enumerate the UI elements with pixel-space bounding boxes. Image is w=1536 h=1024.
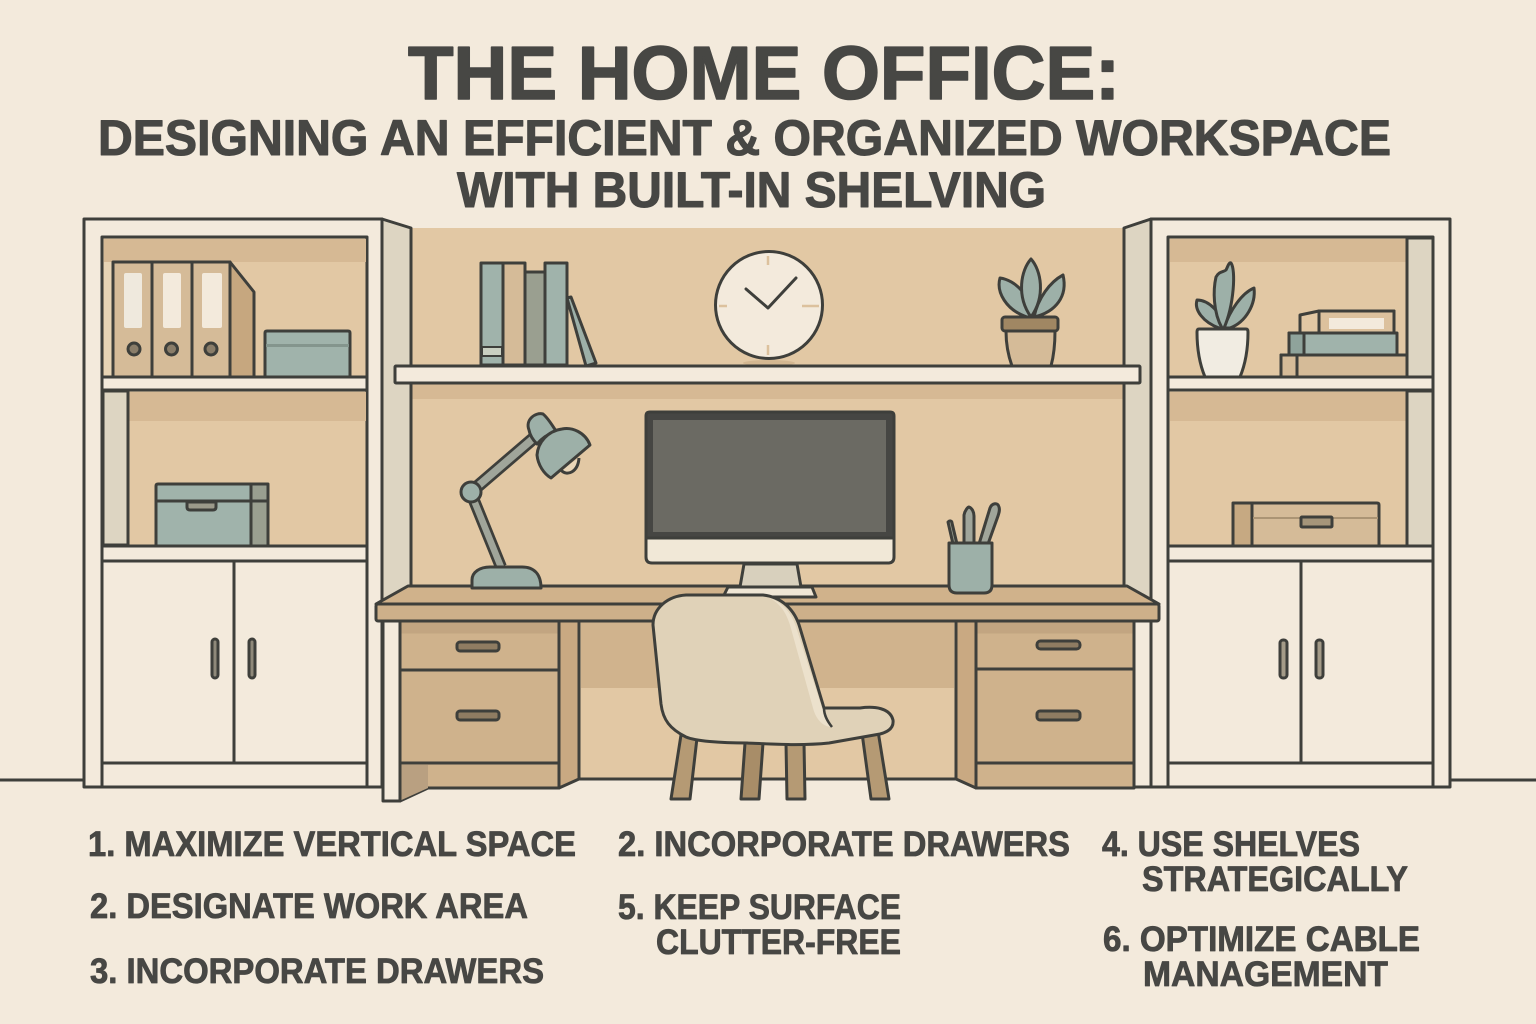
list of tips [88,825,1420,994]
knee space [579,621,956,779]
icon: storage box [156,484,268,546]
icon: desk lamp [461,414,590,588]
bookcase frame [84,219,382,787]
title block [98,31,1391,218]
title: THE HOME OFFICE: [408,31,1120,115]
panel: left bookcase [84,219,411,787]
subtitle line 2: WITH BUILT-IN SHELVING [457,162,1046,218]
monitor stand [740,564,801,587]
icon: desk chair [653,595,893,799]
cabinet doors [1168,561,1433,763]
tip 4 line 2: STRATEGICALLY [1142,860,1408,899]
right pedestal [956,621,1134,788]
floor line [0,778,1536,782]
icon: monitor [646,412,894,597]
icon: potted plant [999,259,1064,366]
subtitle line 1: DESIGNING AN EFFICIENT & ORGANIZED WORKSPACE [98,110,1391,166]
right column [1134,621,1151,787]
tip 6 line 2: MANAGEMENT [1143,955,1388,994]
panel: wall shelf [395,252,1140,383]
panel: desk [376,586,1159,801]
monitor screen [646,412,894,538]
icon: stacked books [1281,311,1407,377]
cabinet doors [102,561,367,763]
upper compartment [1168,237,1433,377]
left column [383,621,400,801]
tip: incorporate drawers: 2. INCORPORATE DRAWERS [618,825,1070,864]
chair shell [653,595,893,745]
upper compartment [102,237,367,377]
bookcase side panel [382,219,411,600]
shelf [1168,377,1433,390]
icon: clock [716,252,822,366]
back wall [411,228,1124,780]
tip 5 line 1: 5. KEEP SURFACE [618,888,901,927]
icon: teal box [265,331,350,377]
icon: tan box [1233,503,1379,546]
shelf [102,546,367,561]
icon: pen cup [948,504,999,593]
bookcase side panel [1124,219,1151,600]
icon: binders [113,262,254,377]
bookcase frame [1151,219,1450,787]
chair back edge [824,708,832,727]
shelf [1168,546,1433,561]
icon: potted plant [1196,263,1254,377]
tip 6 line 1: 6. OPTIMIZE CABLE [1103,920,1420,959]
chair legs [671,731,889,799]
plinth [1168,763,1433,787]
monitor chin [646,530,894,563]
icon: books [481,263,596,366]
tip 4 line 1: 4. USE SHELVES [1102,825,1360,864]
chair highlight [770,598,830,727]
shelf board [395,366,1140,383]
shelf [102,377,367,390]
lower compartment [1168,390,1433,546]
lower compartment [102,390,367,546]
tip 1: 1. MAXIMIZE VERTICAL SPACE [88,825,576,864]
plinth [102,763,367,787]
tip 5 line 2: CLUTTER-FREE [656,923,901,962]
panel: right bookcase [1124,219,1450,787]
left pedestal [400,621,579,801]
monitor base [723,587,816,597]
tip 3: 3. INCORPORATE DRAWERS [90,952,544,991]
desk top [376,586,1159,621]
tip 2: 2. DESIGNATE WORK AREA [90,887,528,926]
